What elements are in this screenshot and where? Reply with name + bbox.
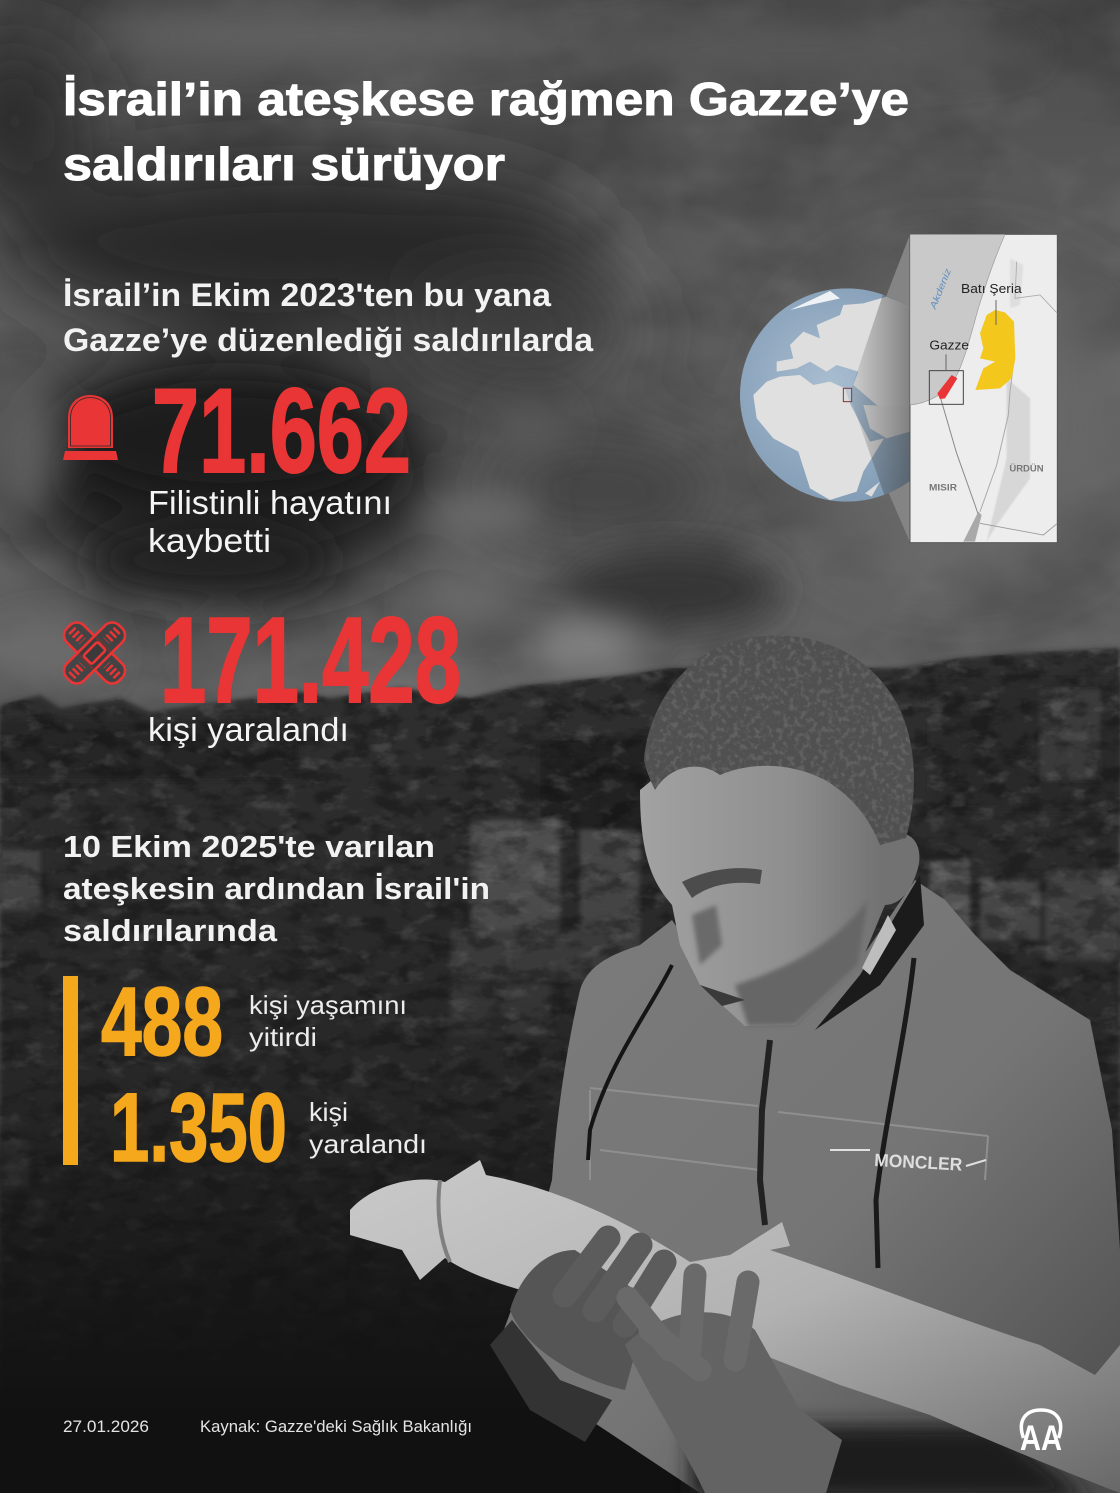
globe	[740, 288, 910, 502]
stat: killed since ceasefire	[101, 967, 407, 1076]
accent bar	[63, 976, 78, 1165]
right palm	[625, 1312, 842, 1493]
title	[63, 73, 909, 190]
brow and eye	[682, 868, 762, 898]
dark smoke masses	[0, 40, 1120, 590]
inset map: Akdeniz	[927, 267, 953, 312]
inset map: Gazze	[929, 338, 969, 353]
photo: grieving man holding a wrapped child	[350, 630, 1120, 1493]
mouth	[700, 985, 745, 1006]
stat: killed: 71.662	[152, 364, 411, 498]
stat: killed since ceasefire: 488	[101, 967, 223, 1076]
hair	[644, 635, 914, 845]
title: İsrail’in ateşkese rağmen Gazze’ye	[63, 73, 909, 125]
inset map: Batı Şeria	[961, 281, 1022, 296]
face	[640, 740, 895, 1026]
nose shadow	[692, 905, 722, 965]
stat: wounded since ceasefire: 1.350	[110, 1073, 287, 1182]
subheading: since October 2023	[63, 277, 593, 358]
zipper	[760, 1040, 770, 1225]
brand text: MONCLER	[874, 1150, 963, 1175]
right fingers	[628, 1275, 748, 1370]
Gaza strip	[937, 375, 957, 399]
globe locator box	[843, 388, 852, 402]
drawstring left	[588, 965, 672, 1160]
subheading: after the ceasefire	[63, 829, 490, 948]
subheading: since October 2023: İsrail’in Ekim 2023'ten bu yana	[63, 277, 551, 313]
subheading: after the ceasefire: 10 Ekim 2025'te varılan	[63, 829, 435, 864]
stat: wounded	[148, 592, 461, 748]
inset map	[910, 234, 1057, 543]
Gaza locator box	[929, 371, 963, 404]
left fingers	[565, 1238, 664, 1325]
footer: source: Kaynak: Gazze'deki Sağlık Bakanlığı	[200, 1418, 472, 1436]
ear	[885, 833, 919, 905]
city skyline and rubble	[0, 648, 1120, 1493]
subheading: after the ceasefire: saldırılarında	[63, 913, 278, 948]
inset map: MISIR	[929, 482, 958, 492]
inset map: ÜRDÜN	[1009, 463, 1044, 473]
beard shading	[735, 900, 868, 1026]
hood collar	[815, 875, 924, 1030]
stat: killed since ceasefire: kişi yaşamını	[249, 990, 407, 1020]
locator map: globe and inset	[740, 234, 1057, 543]
stat: killed: Filistinli hayatını	[148, 484, 392, 521]
logo: AA: AA	[1020, 1419, 1062, 1458]
title: saldırıları sürüyor	[63, 138, 505, 190]
left palm	[510, 1250, 650, 1390]
hands	[490, 1238, 842, 1493]
stat: killed	[148, 364, 411, 559]
stat: wounded since ceasefire: yaralandı	[309, 1129, 427, 1159]
subheading: since October 2023: Gazze’ye düzenlediği saldırılarda	[63, 322, 593, 358]
hoodie	[500, 880, 1120, 1493]
stat: wounded since ceasefire: kişi	[309, 1097, 348, 1127]
stat: killed: kaybetti	[148, 522, 271, 559]
lower body shadow	[690, 1425, 1090, 1493]
wrapped child	[350, 1160, 1120, 1493]
stat: wounded: 171.428	[160, 592, 461, 728]
icon: crossed bandages	[60, 618, 129, 688]
wedge outside the globe	[886, 234, 910, 542]
logo: AA	[1020, 1410, 1062, 1458]
shaded side of globe	[852, 295, 910, 494]
subheading: after the ceasefire: ateşkesin ardından İsrail'in	[63, 871, 490, 906]
footer: date: 27.01.2026	[63, 1418, 149, 1436]
sleeve	[490, 1320, 612, 1442]
stat: killed since ceasefire: yitirdi	[249, 1022, 317, 1052]
stat: wounded: kişi yaralandı	[148, 711, 349, 748]
neck strap	[876, 958, 914, 1268]
icon: tombstone	[63, 395, 118, 460]
pocket seams	[590, 1088, 988, 1180]
West Bank	[975, 310, 1015, 390]
